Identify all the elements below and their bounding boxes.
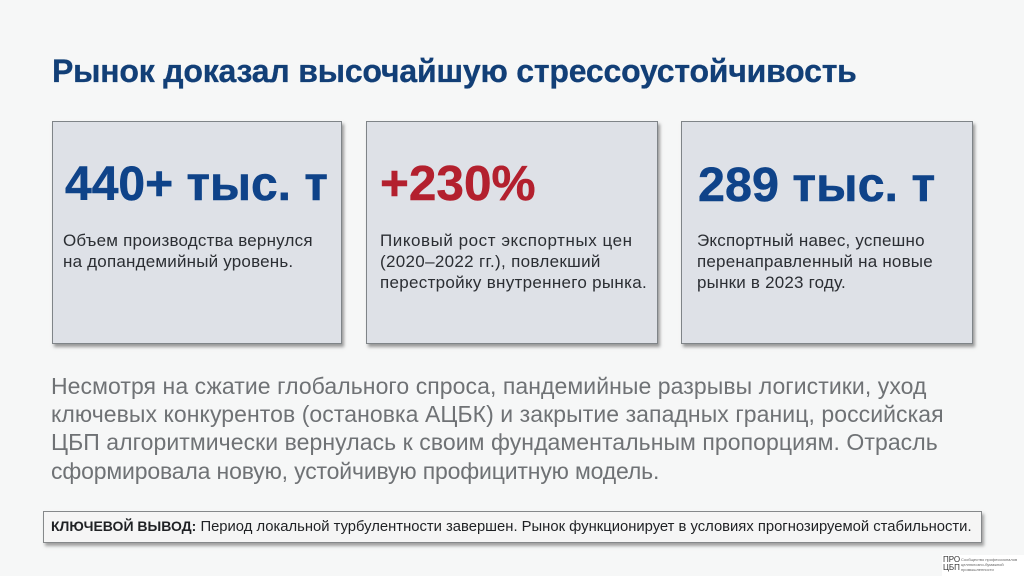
description: overhang: Экспортный навес, успешно [697,231,925,250]
description: overhang: рынки в 2023 году. [697,273,846,292]
logo [942,555,1024,576]
body text: сформировала новую, устойчивую профицитную модель. [51,458,659,484]
logo caption: промышленности [961,567,994,572]
panel: export overhang [681,121,973,344]
description: prices: перестройку внутреннего рынка. [380,273,647,292]
description: production: Объем производства вернулся [63,231,313,250]
body text: Несмотря на сжатие глобального спроса, пандемийные разрывы логистики, уход [51,373,926,399]
stat: +230%: +230% [380,156,536,211]
logo caption [961,557,1017,572]
description: overhang: перенаправленный на новые [697,252,933,271]
logo mark: ПРО [943,555,960,564]
description: prices: (2020–2022 гг.), повлекший [380,252,601,271]
description: prices: Пиковый рост экспортных цен [380,231,633,250]
logo caption: целлюлозно-бумажной [961,562,1004,567]
logo mark: ЦБП [943,563,960,572]
body text: ЦБП алгоритмически вернулась к своим фундаментальным пропорциям. Отрасль [51,429,938,455]
body text: ключевых конкурентов (остановка АЦБК) и закрытие западных границ, российская [51,401,944,427]
description: production [63,231,313,271]
title: Рынок доказал высочайшую стрессоустойчивость [52,53,857,89]
callout: key conclusion [43,511,982,543]
logo mark [943,555,960,572]
logo caption: Сообщество профессионалов [961,557,1017,562]
stat: 440+: 440+ тыс. т [65,158,328,211]
description: production: на допандемийный уровень. [63,252,293,271]
body text [51,373,944,484]
description: overhang [697,231,933,292]
stat: 289: 289 тыс. т [698,158,935,212]
description: prices [380,231,647,292]
callout: key conclusion: КЛЮЧЕВОЙ ВЫВОД: Период локальной турбулентности завершен. Рынок функционирует в условиях прогнозируемой стабильности. [51,518,972,535]
panel: export prices [366,121,658,344]
panel: production volume [52,121,342,344]
